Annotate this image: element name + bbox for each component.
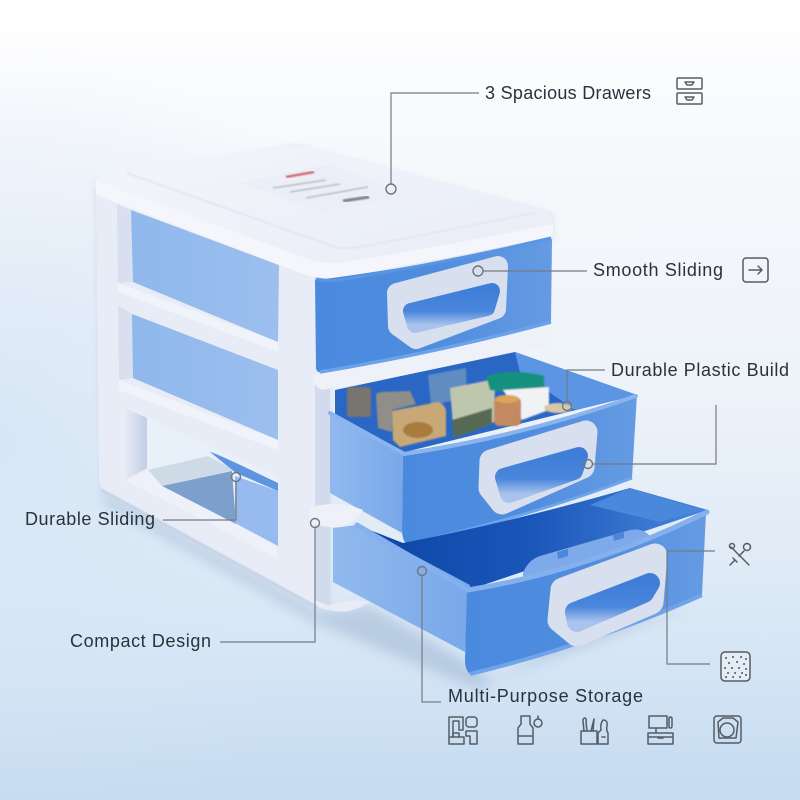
side windows (131, 210, 279, 440)
icon: tools (730, 544, 750, 565)
right post shade (315, 385, 330, 606)
open bay (147, 418, 278, 546)
callout: Durable Sliding: Durable Sliding (25, 509, 155, 529)
icon: organizer (449, 717, 477, 744)
callout: Durable Sliding (25, 472, 240, 529)
floor shadow (100, 490, 700, 690)
callout: Smooth Sliding: Smooth Sliding (593, 260, 723, 280)
callout: Multi-Purpose Storage: Multi-Purpose Storage (448, 686, 643, 706)
icon: sliding arrow (743, 258, 768, 282)
rail highlights (118, 283, 278, 450)
top drawer (313, 238, 552, 390)
soft edge shadow around body (95, 145, 553, 605)
storage items (347, 368, 572, 447)
callout: handle leader with tool and texture icons (667, 544, 750, 681)
callout: Compact Design (70, 518, 320, 651)
product: three-drawer storage organizer (95, 145, 708, 690)
callout: 3 Spacious Drawers: 3 Spacious Drawers (485, 83, 651, 103)
icon: drawers (677, 78, 702, 104)
callout: Multi-Purpose Storage (418, 566, 643, 706)
handle (560, 556, 655, 634)
lid (95, 146, 553, 278)
middle drawer (310, 352, 637, 545)
frame: posts and rails (96, 190, 370, 612)
callout: 3 Spacious Drawers (386, 78, 702, 194)
label sticker (240, 164, 408, 212)
interior and contents (335, 352, 637, 452)
callout: Compact Design: Compact Design (70, 631, 211, 651)
icon: round mirror case (714, 716, 741, 743)
handle (490, 432, 586, 503)
handle (397, 266, 498, 339)
rail shading (125, 470, 277, 558)
callout: Smooth Sliding (473, 258, 768, 282)
callout: Durable Plastic Build (562, 360, 789, 468)
icon row: storage uses (449, 716, 741, 744)
icon: texture (721, 652, 750, 681)
bottom drawer (333, 488, 708, 675)
divider shelf (313, 327, 551, 390)
icon: bottle (518, 716, 542, 744)
support tab (310, 504, 363, 527)
icon: desk (648, 716, 673, 744)
callout: Durable Plastic Build: Durable Plastic Build (611, 360, 789, 380)
icon: cosmetics (581, 718, 608, 744)
